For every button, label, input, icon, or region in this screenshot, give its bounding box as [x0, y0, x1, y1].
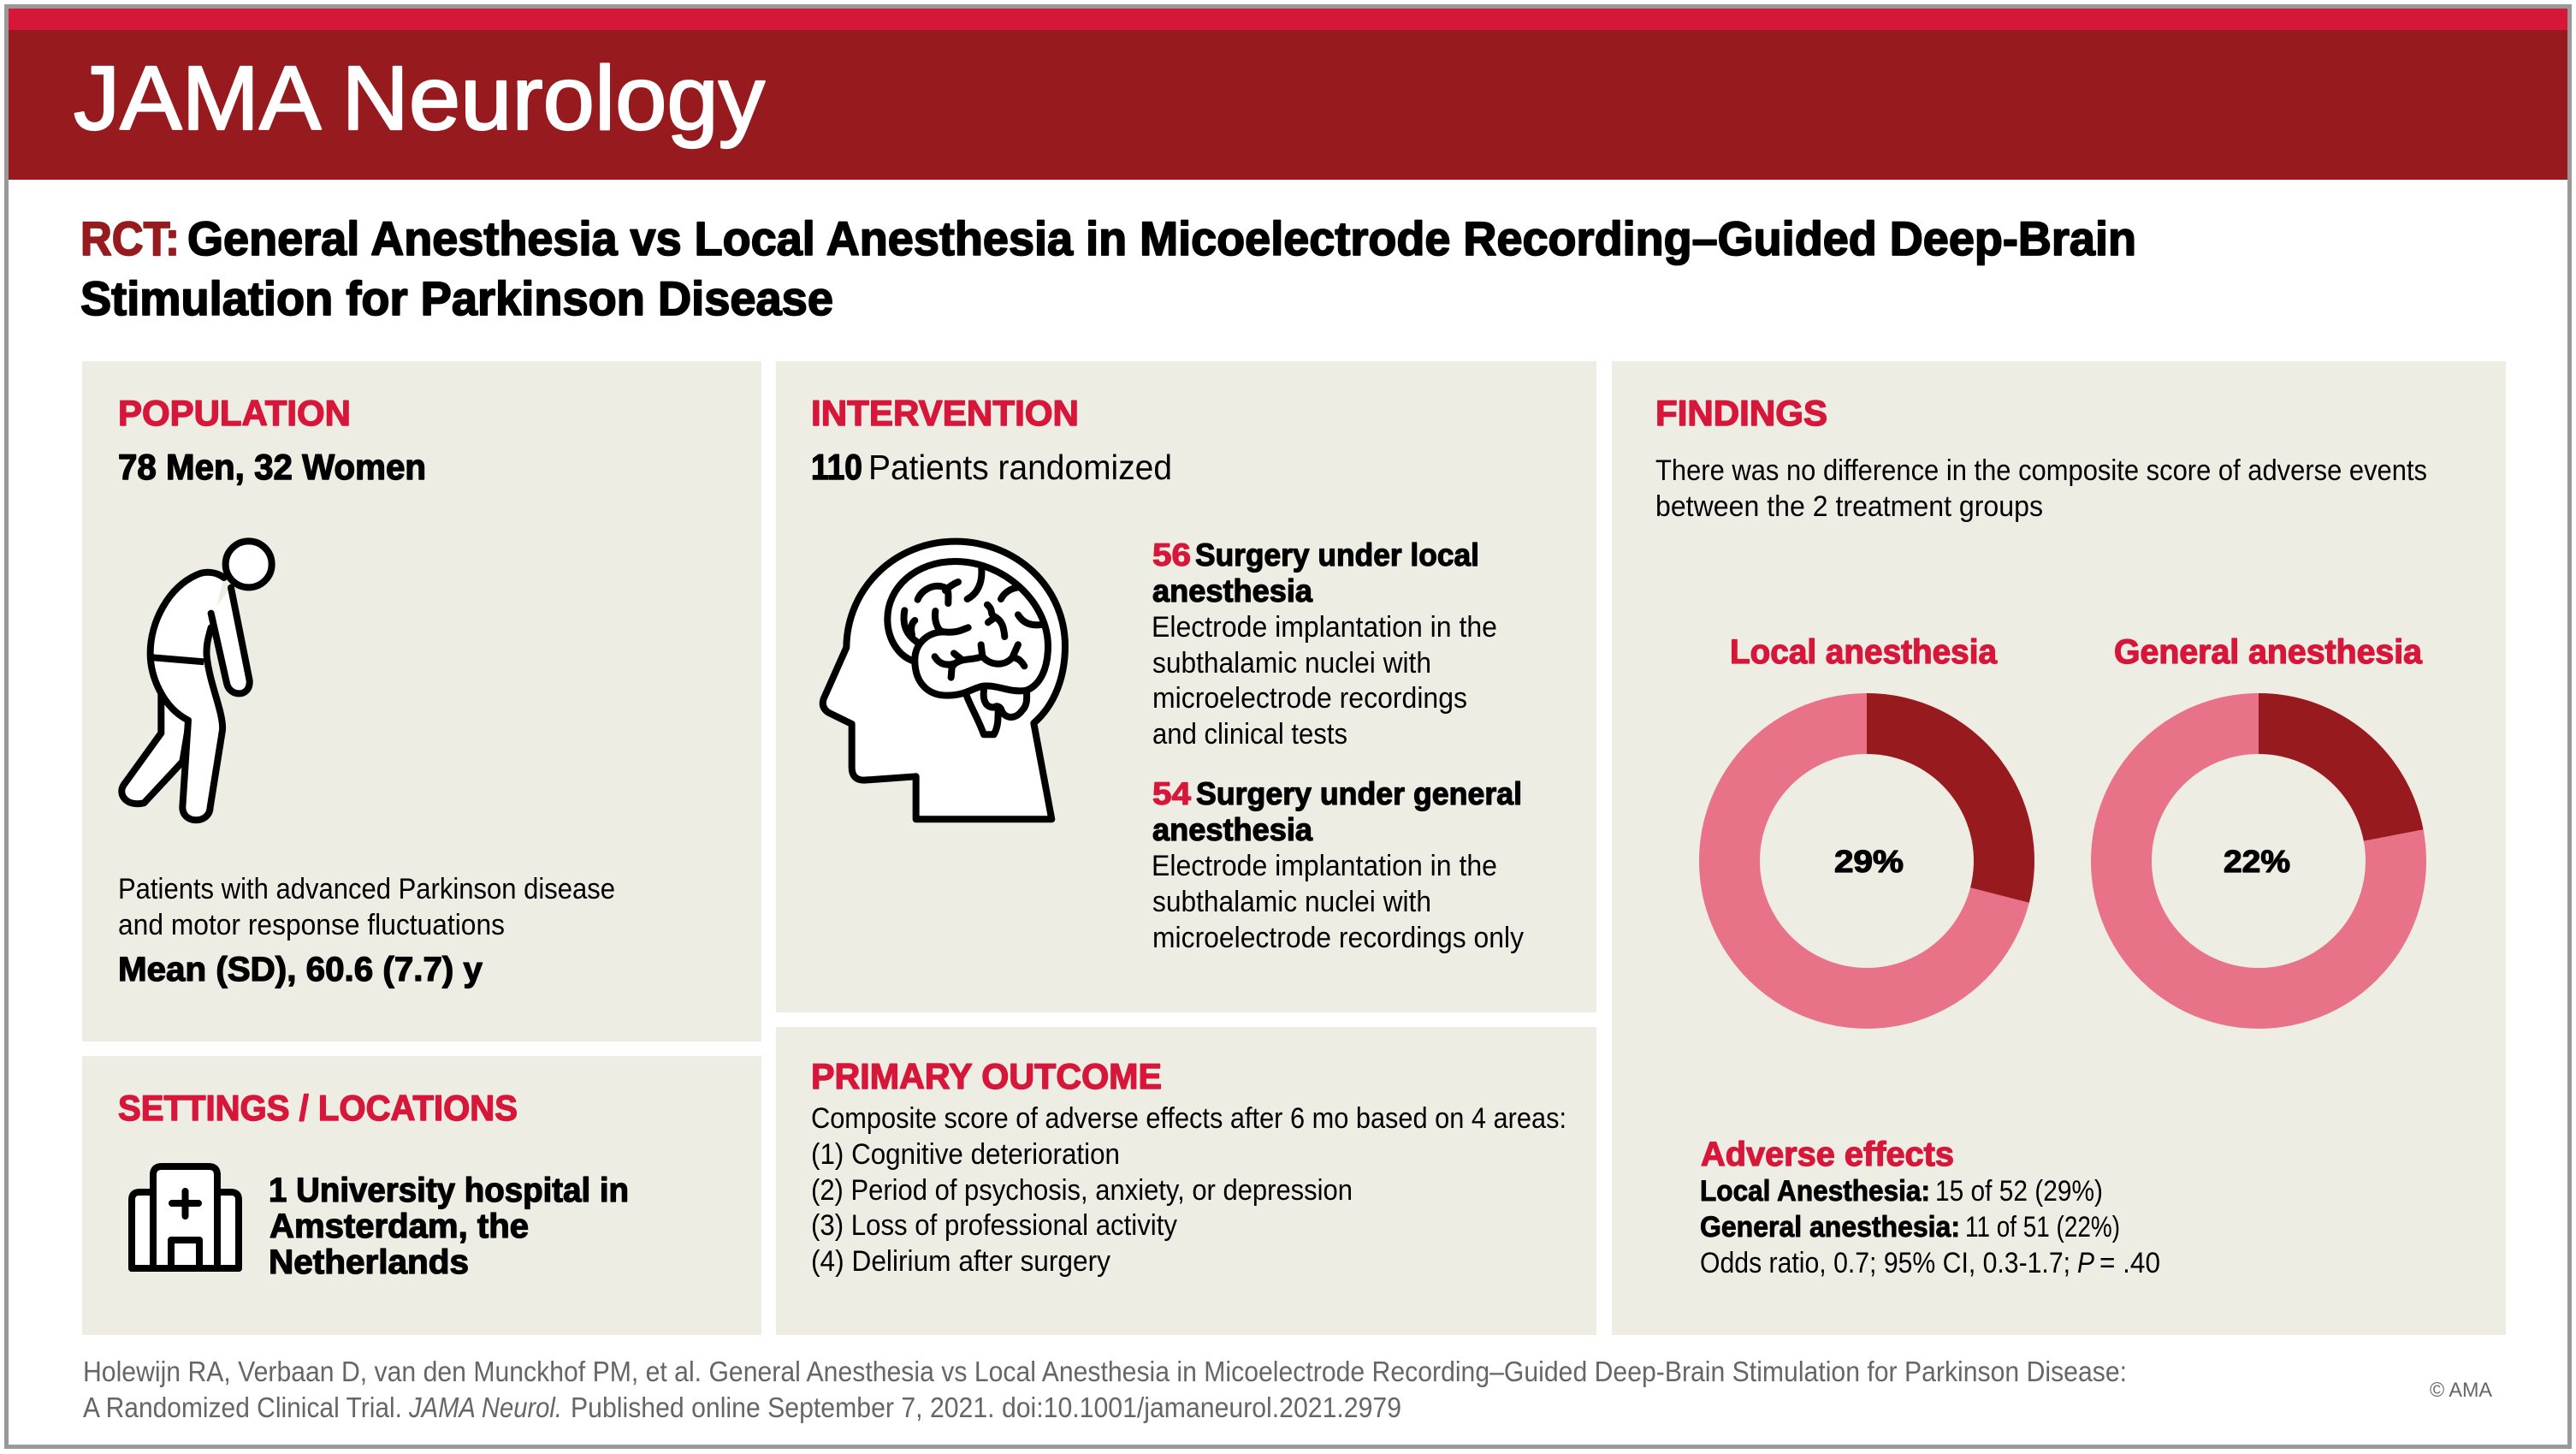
- outcome list: [811, 1102, 1566, 1278]
- outcome list: Composite score of adverse effects after 6 mo based on 4 areas:: [811, 1102, 1566, 1135]
- panel: findings: [1612, 361, 2506, 1335]
- arm: general anesthesia: microelectrode recordings only: [1152, 922, 1524, 954]
- icon: hospital: [132, 1166, 239, 1268]
- randomized count: 110: [811, 447, 862, 487]
- panel: settings / locations: [82, 1056, 761, 1335]
- randomized count: Patients randomized: [868, 448, 1172, 487]
- description: [118, 873, 615, 941]
- arm: general anesthesia: anesthesia: [1152, 812, 1312, 847]
- adverse effects summary: Odds ratio, 0.7; 95% CI, 0.3-1.7;: [1700, 1247, 2070, 1279]
- adverse effects summary: = .40: [2099, 1247, 2160, 1279]
- heading: findings: FINDINGS: [1655, 393, 1827, 433]
- arm: local anesthesia: Electrode implantation in the: [1152, 611, 1497, 644]
- arm: local anesthesia: and clinical tests: [1152, 718, 1347, 751]
- arm: general anesthesia: subthalamic nuclei with: [1152, 886, 1431, 918]
- adverse effects summary: General anesthesia:: [1700, 1211, 1960, 1243]
- arm: general anesthesia: Surgery under general: [1196, 776, 1522, 811]
- label: general anesthesia: General anesthesia: [2114, 633, 2423, 671]
- location text: [269, 1172, 629, 1281]
- outcome list: (2) Period of psychosis, anxiety, or depression: [811, 1174, 1353, 1207]
- location text: Netherlands: [269, 1243, 469, 1281]
- icon: head with brain: [823, 542, 1065, 819]
- citation: [83, 1356, 2127, 1423]
- arm: general anesthesia: Electrode implantation in the: [1152, 850, 1497, 882]
- findings statement: [1655, 454, 2427, 523]
- arm: local anesthesia: Surgery under local: [1195, 537, 1479, 573]
- location text: Amsterdam, the: [269, 1208, 529, 1245]
- outcome list: (4) Delirium after surgery: [811, 1245, 1110, 1278]
- arm: local anesthesia: subthalamic nuclei with: [1152, 647, 1431, 680]
- outcome list: (1) Cognitive deterioration: [811, 1138, 1120, 1171]
- arm: local anesthesia: microelectrode recordings: [1152, 682, 1467, 715]
- citation: Published online September 7, 2021. doi:10.1001/jamaneurol.2021.2979: [571, 1392, 1401, 1423]
- description: and motor response fluctuations: [118, 909, 505, 941]
- donut chart: local anesthesia: [1730, 633, 2034, 998]
- value: 22%: 22%: [2224, 844, 2290, 879]
- value: 29%: 29%: [1834, 844, 1904, 879]
- panel: intervention: [776, 361, 1596, 1012]
- heading: adverse effects: Adverse effects: [1701, 1136, 1954, 1173]
- heading: primary outcome: PRIMARY OUTCOME: [811, 1056, 1162, 1096]
- panel: population: [82, 361, 761, 1042]
- outcome list: (3) Loss of professional activity: [811, 1209, 1177, 1242]
- adverse effects summary: 15 of 52 (29%): [1935, 1175, 2103, 1208]
- arm: local anesthesia: anesthesia: [1152, 573, 1312, 608]
- panel: primary outcome: [776, 1027, 1596, 1335]
- title: General Anesthesia vs Local Anesthesia in Micoelectrode Recording–Guided Deep-Brain: [187, 211, 2136, 265]
- adverse effects summary: P: [2077, 1247, 2094, 1279]
- header banner: [9, 9, 2567, 180]
- icon: stooped person: [121, 541, 272, 820]
- heading: intervention: INTERVENTION: [811, 393, 1079, 433]
- adverse effects summary: Local Anesthesia:: [1700, 1175, 1930, 1208]
- title: [80, 211, 2136, 325]
- description: Patients with advanced Parkinson disease: [118, 873, 615, 905]
- heading: population: POPULATION: [118, 393, 351, 433]
- adverse effects summary: 11 of 51 (22%): [1965, 1211, 2120, 1243]
- mean age: Mean (SD), 60.6 (7.7) y: [118, 951, 483, 988]
- population counts: 78 Men, 32 Women: [118, 447, 426, 487]
- arm: local anesthesia: 56: [1152, 537, 1191, 573]
- adverse effects summary: [1700, 1136, 2160, 1279]
- label: local anesthesia: Local anesthesia: [1730, 633, 1998, 671]
- title: RCT:: [80, 211, 180, 265]
- citation: JAMA Neurol.: [408, 1392, 562, 1423]
- findings statement: There was no difference in the composite score of adverse events: [1655, 454, 2427, 487]
- donut chart: general anesthesia: [2114, 633, 2423, 998]
- arm: general anesthesia: 54: [1152, 776, 1191, 811]
- title: Stimulation for Parkinson Disease: [80, 271, 833, 325]
- copyright: © AMA: [2430, 1379, 2492, 1402]
- findings statement: between the 2 treatment groups: [1655, 490, 2043, 523]
- journal name: JAMA Neurology: [74, 48, 765, 149]
- arm: general anesthesia: [1152, 776, 1524, 954]
- citation: A Randomized Clinical Trial.: [83, 1392, 402, 1423]
- citation: Holewijn RA, Verbaan D, van den Munckhof PM, et al. General Anesthesia vs Local Anesthesia in Micoelectrode Recording–Guided Deep-Brain Stimulation for Parkinson Disease:: [83, 1356, 2127, 1387]
- arm: local anesthesia: [1152, 537, 1497, 751]
- heading: settings: SETTINGS / LOCATIONS: [118, 1088, 518, 1128]
- location text: 1 University hospital in: [269, 1172, 629, 1209]
